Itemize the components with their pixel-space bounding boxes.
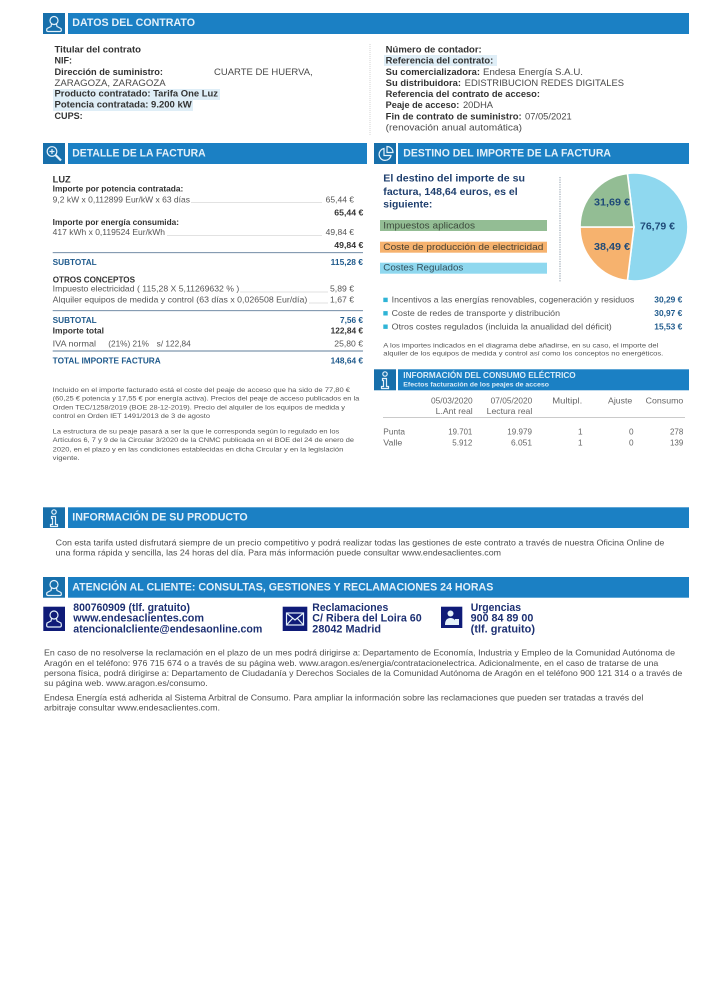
consumption table: 139 — [670, 439, 684, 448]
peaje notes: Orden TEC/1258/2019 (BOE 28-12-2019). Precio del alquiler de los equipos de medida y — [53, 405, 346, 412]
invoice lines: LUZ — [53, 174, 71, 184]
consumption table: 0 — [629, 428, 634, 437]
consumption table: Punta — [383, 428, 405, 437]
invoice lines: OTROS CONCEPTOS — [53, 275, 136, 284]
claims information — [44, 649, 683, 713]
contract details right column: Endesa Energía S.A.U. — [483, 67, 583, 77]
peaje notes: vigente. — [53, 455, 80, 462]
peaje notes: La estructura de su peaje pasará a ser la que le corresponda según lo regulado en los — [53, 428, 340, 435]
invoice lines: Importe por potencia contratada: — [53, 185, 183, 194]
consumption table: Ajuste — [608, 396, 633, 405]
invoice lines: IVA normal — [53, 340, 96, 349]
invoice lines: 49,84 € — [326, 228, 354, 237]
invoice lines — [53, 174, 364, 365]
regulated costs breakdown — [383, 296, 683, 332]
claims information: arbitraje consultar www.endesaclientes.com. — [44, 704, 220, 713]
consumption table: 19.701 — [448, 428, 473, 437]
consumption table: 19.979 — [507, 428, 532, 437]
regulated costs breakdown: Otros costes regulados (incluida la anualidad del déficit) — [392, 323, 612, 332]
panel: destino del importe de la factura — [374, 143, 689, 358]
contract details left column: ZARAGOZA, ZARAGOZA — [54, 78, 166, 88]
destination intro text: siguiente: — [383, 200, 432, 211]
claims information: su página web. www.aragon.es/consumo. — [44, 679, 208, 688]
claims information: persona física, podrá dirigirse a: Departamento de Ciudadanía y Derechos Sociales de la Comunidad Autónoma de Aragón en el teléfono 900 121 314 o a través de — [44, 669, 683, 678]
contact: urgencias: 900 84 89 00 — [471, 613, 533, 625]
header: consumo electrico: Efectos facturación de los peajes de acceso — [403, 381, 549, 388]
header: detalle de la factura: DETALLE DE LA FACTURA — [72, 148, 206, 160]
peaje notes: control en Orden IET 1491/2013 de 3 de agosto — [53, 413, 210, 420]
contract details left column: Producto contratado: Tarifa One Luz — [54, 89, 219, 99]
contact: phone and web: atencionalcliente@endesaonline.com — [73, 623, 262, 635]
product description: una forma rápida y sencilla, las 24 horas del día. Para más información puede consultar www.endesaclientes.com — [56, 549, 501, 558]
contract details right column: Peaje de acceso: — [386, 100, 459, 110]
consumption table: Consumo — [646, 396, 684, 405]
regulated costs breakdown: 30,97 € — [654, 309, 683, 318]
destination intro text — [383, 174, 525, 211]
contract details left column: NIF: — [54, 56, 72, 66]
header: datos del contrato — [68, 13, 689, 34]
contract details right column: Su distribuidora: — [386, 78, 461, 88]
regulated costs breakdown: 15,53 € — [654, 323, 683, 332]
invoice lines: 9,2 kW x 0,112899 Eur/kW x 63 días — [53, 195, 190, 204]
contract details left column: CUARTE DE HUERVA, — [214, 67, 313, 77]
diagram footnote — [383, 342, 663, 358]
panel: informacion de su producto — [43, 507, 689, 558]
legend: costes regulados — [380, 263, 547, 274]
invoice lines: Impuesto electricidad ( 115,28 X 5,11269632 % ) — [53, 285, 240, 294]
regulated costs breakdown: Incentivos a las energías renovables, cogeneración y residuos — [392, 296, 634, 305]
panel: atencion al cliente — [43, 577, 689, 713]
consumption table: 0 — [629, 439, 634, 448]
consumption table: 1 — [578, 428, 583, 437]
panel: informacion del consumo electrico — [374, 369, 689, 448]
invoice lines: Importe total — [53, 326, 104, 335]
peaje notes — [53, 387, 360, 462]
consumption table: 5.912 — [452, 439, 473, 448]
consumption table: Lectura real — [487, 407, 532, 416]
invoice lines: Alquiler equipos de medida y control (63 días x 0,026508 Eur/día) — [53, 296, 308, 305]
peaje notes: Incluido en el importe facturado está el coste del peaje de acceso que ha sido de 77,80 € — [53, 387, 350, 394]
pie chart: 31,69 € — [594, 198, 630, 209]
icon: magnifier — [43, 143, 65, 164]
contact: urgencias: (tlf. gratuito) — [471, 623, 535, 635]
consumption table: 278 — [670, 428, 684, 437]
invoice lines: SUBTOTAL — [53, 258, 97, 267]
contract details right column: 20DHA — [463, 100, 493, 110]
contact: reclamaciones: 28042 Madrid — [312, 623, 381, 635]
regulated costs breakdown: Coste de redes de transporte y distribución — [392, 309, 560, 318]
claims information: En caso de no resolverse la reclamación en el plazo de un mes podrá dirigirse a: Departamento de Economía, Industria y Empleo de la Comunidad Autónoma de — [44, 649, 675, 658]
invoice lines: 25,80 € — [334, 340, 363, 349]
destination intro text: El destino del importe de su — [383, 174, 525, 185]
contact: phone and web — [43, 602, 262, 635]
regulated costs breakdown: 30,29 € — [654, 296, 683, 305]
contract details left column — [53, 44, 313, 121]
header: atencion al cliente — [68, 577, 689, 598]
contact: urgencias — [441, 602, 535, 635]
contract details left column: CUPS: — [54, 111, 83, 121]
contract details right column: Su comercializadora: — [386, 67, 480, 77]
panel: datos del contrato — [43, 13, 689, 136]
pie chart: 38,49 € — [594, 242, 630, 253]
invoice lines: 7,56 € — [340, 316, 363, 325]
contact: urgencias: Urgencias — [471, 602, 521, 614]
consumption table — [383, 396, 685, 448]
claims information: Endesa Energía está adherida al Sistema Arbitral de Consumo. Para ampliar la información sobre las reclamaciones que pueden ser tratadas a través del — [44, 694, 643, 703]
icon: person — [43, 577, 65, 598]
invoice lines: 148,64 € — [331, 356, 363, 365]
invoice lines: SUBTOTAL — [53, 316, 97, 325]
header: destino del importe — [398, 143, 689, 164]
legend: impuestos aplicados — [380, 220, 547, 231]
invoice lines: 5,89 € — [330, 285, 354, 294]
invoice lines: 49,84 € — [334, 241, 364, 250]
contract details right column: Referencia del contrato: — [386, 56, 493, 66]
invoice lines: TOTAL IMPORTE FACTURA — [53, 356, 161, 365]
contract details right column: Fin de contrato de suministro: — [386, 112, 522, 122]
invoice lines: 115,28 € — [331, 258, 363, 267]
contract details right column: Número de contador: — [386, 44, 482, 54]
consumption table: L.Ant real — [436, 407, 473, 416]
header: consumo electrico — [398, 369, 689, 390]
legend: coste de produccion: Coste de producción de electricidad — [383, 242, 543, 252]
peaje notes: (60,25 € potencia y 17,55 € por energía activa). Precios del peaje de acceso publicados en la — [53, 396, 360, 403]
contact: phone and web: 800760909 (tlf. gratuito) — [73, 602, 190, 614]
icon: info — [43, 507, 65, 528]
header: informacion de su producto — [68, 507, 689, 528]
contract details left column: Dirección de suministro: — [54, 67, 163, 77]
consumption table: Multipl. — [552, 396, 582, 405]
header: destino del importe: DESTINO DEL IMPORTE DE LA FACTURA — [403, 148, 611, 160]
pie chart — [580, 173, 688, 281]
header: detalle de la factura — [68, 143, 367, 164]
contact: reclamaciones — [283, 602, 422, 635]
contract details left column: Titular del contrato — [54, 44, 142, 54]
consumption table: 07/05/2020 — [491, 396, 533, 405]
pie chart: 76,79 € — [640, 221, 675, 232]
invoice lines: 65,44 € — [334, 209, 364, 218]
icon: info — [374, 369, 396, 390]
contract details right column: (renovación anual automática) — [386, 122, 522, 132]
peaje notes: Artículos 6, 7 y 9 de la Circular 3/2020 de la CNMC publicada en el BOE del 24 de enero de — [53, 437, 354, 444]
invoice lines: Importe por energía consumida: — [53, 218, 179, 227]
invoice lines: 417 kWh x 0,119524 Eur/kWh — [53, 228, 165, 237]
invoice lines: 122,84 € — [331, 326, 363, 335]
panel: detalle de la factura — [43, 143, 367, 462]
contract details right column: 07/05/2021 — [525, 112, 572, 122]
destination intro text: factura, 148,64 euros, es el — [383, 187, 518, 198]
legend: impuestos aplicados: Impuestos aplicados — [383, 220, 476, 230]
header: informacion de su producto: INFORMACIÓN DE SU PRODUCTO — [72, 511, 248, 524]
invoice lines: s/ 122,84 — [157, 340, 191, 349]
consumption table: Valle — [383, 439, 403, 448]
product description — [56, 539, 665, 558]
legend: costes regulados: Costes Regulados — [383, 263, 464, 273]
diagram footnote: A los importes indicados en el diagrama debe añadirse, en su caso, el importe del — [383, 342, 659, 349]
claims information: Aragón en el teléfono: 976 715 674 o a través de su página web. www.aragon.es/energia/contratacionelectrica. Adicionalmente, en el caso de tratarse de una — [44, 659, 659, 668]
diagram footnote: alquiler de los equipos de medida y control así como los conceptos no energéticos. — [383, 351, 663, 358]
icon: pie chart — [374, 143, 396, 164]
contract details right column: Referencia del contrato de acceso: — [386, 89, 540, 99]
contract details right column — [384, 44, 624, 132]
header: consumo electrico: INFORMACIÓN DEL CONSUMO ELÉCTRICO — [403, 369, 576, 380]
contract details right column: EDISTRIBUCION REDES DIGITALES — [465, 78, 624, 88]
product description: Con esta tarifa usted disfrutará siempre de un precio competitivo y podrá realizar todas las gestiones de este contrato a través de nuestra Oficina Online de — [56, 539, 665, 548]
header: atencion al cliente: ATENCIÓN AL CLIENTE: CONSULTAS, GESTIONES Y RECLAMACIONES 24 HORAS — [72, 580, 493, 593]
consumption table: 05/03/2020 — [431, 396, 473, 405]
contact: phone and web: www.endesaclientes.com — [72, 613, 204, 625]
icon: person — [43, 13, 65, 34]
invoice lines: (21%) 21% — [108, 340, 149, 349]
consumption table: 6.051 — [511, 439, 532, 448]
contact: reclamaciones: Reclamaciones — [312, 602, 388, 614]
contract details left column: Potencia contratada: 9.200 kW — [54, 100, 192, 110]
contact: reclamaciones: C/ Ribera del Loira 60 — [312, 613, 422, 625]
consumption table: 1 — [578, 439, 583, 448]
header: datos del contrato: DATOS DEL CONTRATO — [72, 17, 195, 29]
invoice lines: 1,67 € — [330, 296, 354, 305]
invoice lines: 65,44 € — [326, 195, 354, 204]
peaje notes: 2020, en el plazo y en las condiciones establecidas en dicha Circular y en la legislación — [53, 446, 344, 453]
